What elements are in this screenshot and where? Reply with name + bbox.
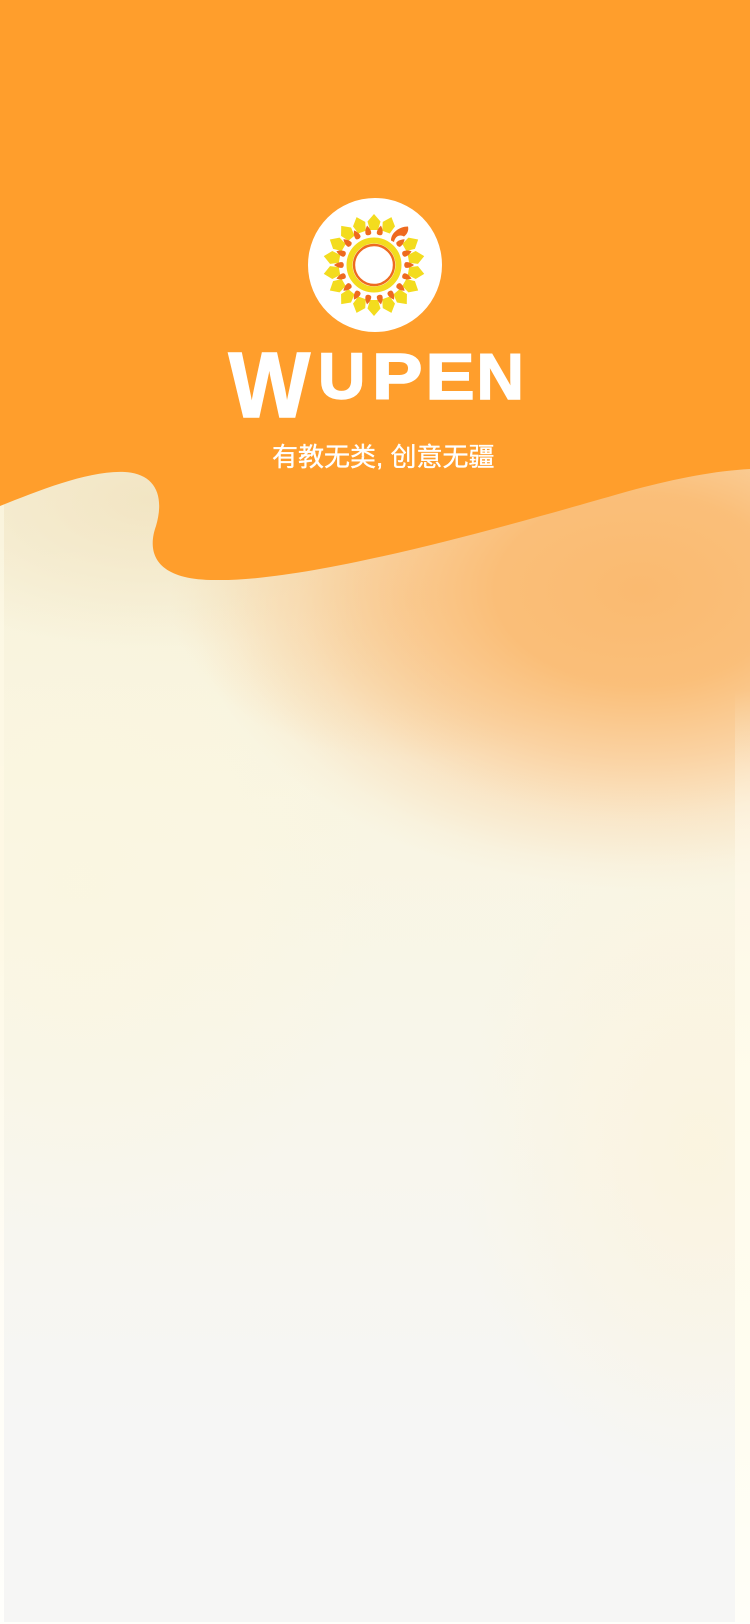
logo: white circle — [308, 198, 442, 332]
slogan: 有教无类, 创意无疆 — [272, 442, 494, 472]
letter N: N — [476, 340, 524, 413]
logo: sunflower — [323, 214, 425, 316]
wordmark — [228, 334, 524, 438]
yellow ring — [350, 240, 398, 290]
left edge strip — [0, 500, 4, 1624]
letter U: U — [318, 340, 365, 412]
bottom edge strip — [0, 1622, 750, 1624]
yellow petals — [323, 214, 425, 316]
orange seeds — [334, 225, 414, 305]
letter E: E — [426, 340, 475, 413]
right edge strip — [735, 690, 750, 1624]
orange leaf — [391, 226, 408, 242]
letter W: W — [228, 334, 310, 438]
orange ring — [354, 245, 394, 285]
letter P: P — [372, 340, 423, 413]
orange wave shape — [0, 0, 750, 580]
